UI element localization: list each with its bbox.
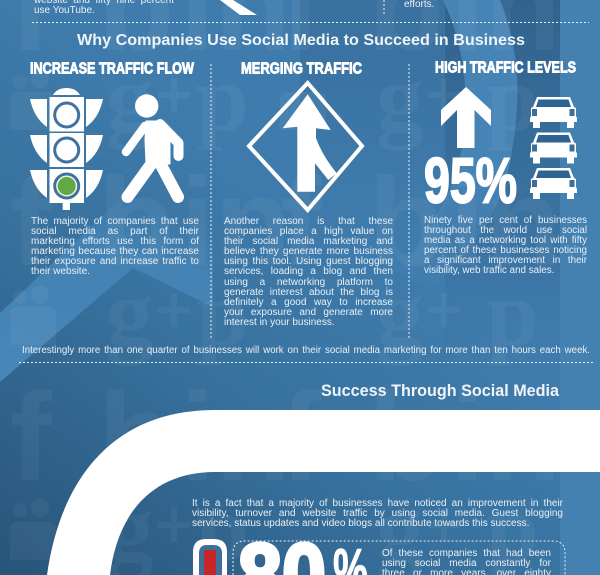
text: column 3	[424, 214, 587, 276]
heading: why companies: Why Companies Use Social Media to Succeed in Business	[77, 32, 525, 49]
text: column 1: The majority of companies that use	[31, 216, 199, 227]
white curved road band	[47, 410, 600, 575]
text: 80% description: Of these companies that had been	[382, 548, 551, 558]
text: success intro	[192, 498, 563, 529]
dashed stat box	[233, 541, 565, 575]
background: b	[98, 153, 174, 292]
icon: cars	[530, 97, 577, 199]
text: column 2: interest in your business.	[224, 317, 335, 328]
text: column 3: Ninety five per cent of businesses	[424, 214, 587, 226]
background: g	[106, 45, 154, 151]
icon: up arrow	[441, 87, 491, 148]
icon: car 2	[530, 132, 577, 164]
text: column 1: their website.	[31, 266, 90, 277]
text: column 2: generate interest about the blog is	[224, 287, 393, 298]
text: column 2: services, loading a blog and then	[224, 266, 393, 277]
text: column 3: media as a networking tool with fifty	[424, 235, 587, 246]
background: f	[10, 368, 52, 507]
heading: success through social media: Success Through Social Media	[321, 382, 560, 400]
background: in	[180, 153, 291, 292]
background: p	[196, 260, 249, 366]
icon: car 3	[530, 168, 577, 199]
text: column 2: companies place a high value on	[224, 226, 393, 237]
background: p	[196, 45, 249, 151]
text: column 3: visibility, web traffic and sales.	[424, 265, 554, 276]
text: column 2: Another reason is that these	[224, 216, 393, 227]
background: p	[486, 45, 539, 151]
text: column 2: using a networking platform to	[224, 277, 393, 288]
background: f	[280, 368, 322, 507]
text: top left fragment	[34, 0, 174, 16]
text: column 2: their social media marketing and	[224, 236, 393, 247]
text: success intro: services, status updates and video blogs all contribute towards this success.	[192, 518, 529, 529]
text: column 2: using this tool. Using guest blogging	[224, 256, 393, 267]
background: f	[10, 153, 52, 292]
background: in	[450, 153, 561, 292]
text: column 3: percent of these businesses noticing	[424, 245, 587, 256]
background: in	[180, 368, 291, 507]
background: f	[280, 153, 322, 292]
text: column 2	[224, 216, 393, 328]
heading: increase traffic flow: INCREASE TRAFFIC FLOW	[30, 60, 194, 78]
background: b	[368, 153, 444, 292]
text: column 3: a significant improvement in their	[424, 255, 587, 266]
text: success intro: visibility, turnover and website traffic by using social media. Guest blogging	[192, 508, 563, 519]
text: column 2: definitely a good way to increase	[224, 297, 393, 308]
icon: thermometer	[193, 539, 227, 575]
background: in	[450, 368, 561, 507]
text: column 1: their exposure and increase traffic to	[31, 256, 199, 267]
text: column 3: throughout the world use social	[424, 225, 587, 236]
heading: merging traffic: MERGING TRAFFIC	[241, 60, 362, 78]
text: column 1: marketing efforts use this form of	[31, 236, 199, 247]
background: g	[376, 260, 424, 366]
background: g	[376, 45, 424, 151]
icon: traffic light	[30, 88, 103, 210]
text: column 2: your exposure and generate more	[224, 307, 393, 318]
stat: 95%: 95%	[424, 144, 517, 216]
background: b	[368, 368, 444, 507]
icon: white arrow fragment at top	[220, 0, 257, 15]
text: column 1: marketing because they can increase	[31, 246, 199, 257]
text: column 1: social media as part of their	[31, 226, 199, 237]
text: column 2: believe they generate more business	[224, 246, 393, 257]
text: column 1	[31, 216, 200, 277]
background: b	[98, 368, 174, 507]
icon: walking person	[126, 94, 178, 197]
text: 80% description	[382, 548, 551, 575]
text: interestingly line: Interestingly more than one quarter of businesses will work on their social media marketing for more than ten hours each week.	[22, 344, 590, 356]
icon: car 1	[530, 97, 577, 128]
text: success intro: It is a fact that a majority of businesses have noticed an improvement in their	[192, 498, 563, 508]
text: top left fragment: use YouTube.	[34, 5, 95, 16]
icon: merge road sign	[249, 83, 362, 210]
background: p	[486, 260, 539, 366]
top section dividers	[19, 0, 595, 362]
background: g	[106, 260, 154, 366]
text: 80% description: using social media constantly for	[382, 558, 551, 569]
